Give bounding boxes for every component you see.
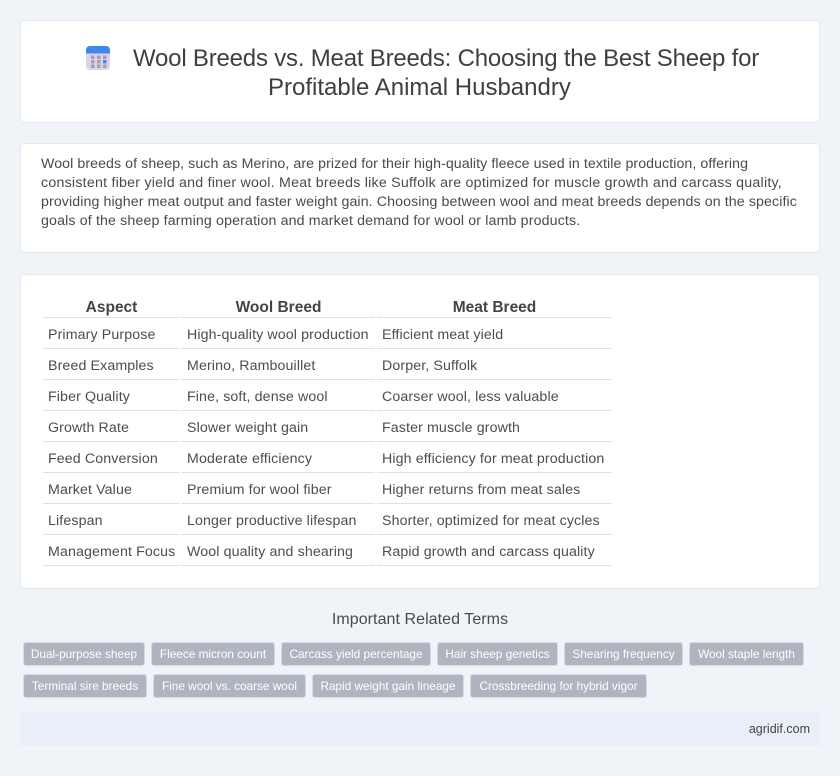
table rows: Primary Purpose bbox=[48, 327, 155, 343]
related term tags: Fleece micron count bbox=[160, 647, 266, 661]
panel: introduction bbox=[20, 143, 820, 253]
related term tags: Carcass yield percentage bbox=[289, 647, 423, 661]
table rows: Slower weight gain bbox=[187, 420, 308, 436]
table rows: Merino, Rambouillet bbox=[187, 358, 315, 374]
table rows: Faster muscle growth bbox=[382, 420, 520, 436]
table rows: Moderate efficiency bbox=[187, 451, 312, 467]
table rows: Rapid growth and carcass quality bbox=[382, 544, 595, 560]
table rows: Shorter, optimized for meat cycles bbox=[382, 513, 600, 529]
related term tags: Crossbreeding for hybrid vigor bbox=[479, 679, 638, 693]
related term tags: Terminal sire breeds bbox=[32, 679, 138, 693]
table rows: Lifespan bbox=[48, 513, 103, 529]
table header: Wool Breed bbox=[236, 299, 321, 316]
intro text: consistent fiber yield and finer wool. Meat breeds like Suffolk are optimized for muscle growth and carcass quality, bbox=[41, 175, 782, 191]
table header: Aspect bbox=[86, 299, 137, 316]
title: Wool Breeds vs. Meat Breeds: Choosing the Best Sheep for bbox=[133, 45, 759, 72]
table rows: Market Value bbox=[48, 482, 132, 498]
table rows: Coarser wool, less valuable bbox=[382, 389, 559, 405]
related term tags: Dual-purpose sheep bbox=[31, 647, 137, 661]
intro text: providing higher meat output and faster weight gain. Choosing between wool and meat breeds depends on the specific bbox=[41, 194, 797, 210]
table rows: Dorper, Suffolk bbox=[382, 358, 477, 374]
comparison table bbox=[43, 299, 612, 566]
table rows: Longer productive lifespan bbox=[187, 513, 357, 529]
table rows: Growth Rate bbox=[48, 420, 129, 436]
table rows: Fine, soft, dense wool bbox=[187, 389, 328, 405]
intro text bbox=[41, 156, 797, 229]
table rows: Management Focus bbox=[48, 544, 175, 560]
table rows: Efficient meat yield bbox=[382, 327, 503, 343]
related term tags bbox=[23, 642, 804, 698]
table rows: Wool quality and shearing bbox=[187, 544, 353, 560]
header panel bbox=[20, 20, 820, 123]
table rows: High efficiency for meat production bbox=[382, 451, 604, 467]
panel: comparison table bbox=[20, 274, 820, 589]
related term tags: Fine wool vs. coarse wool bbox=[162, 679, 297, 693]
footer bar bbox=[20, 712, 820, 746]
table rows: Feed Conversion bbox=[48, 451, 158, 467]
related term tags: Hair sheep genetics bbox=[445, 647, 550, 661]
table rows: Breed Examples bbox=[48, 358, 154, 374]
title bbox=[133, 45, 759, 101]
table rows: Premium for wool fiber bbox=[187, 482, 332, 498]
related terms heading: Important Related Terms bbox=[332, 611, 508, 628]
table header: Meat Breed bbox=[453, 299, 536, 316]
related term tags: Wool staple length bbox=[698, 647, 795, 661]
title: Profitable Animal Husbandry bbox=[268, 74, 571, 101]
intro text: goals of the sheep farming operation and market demand for wool or lamb products. bbox=[41, 213, 580, 229]
table header bbox=[43, 299, 612, 318]
table rows bbox=[43, 327, 612, 566]
related term tags: Rapid weight gain lineage bbox=[320, 679, 456, 693]
icon: calendar bbox=[86, 46, 110, 70]
footer credit: agridif.com bbox=[749, 722, 810, 736]
table rows: High-quality wool production bbox=[187, 327, 369, 343]
table rows: Higher returns from meat sales bbox=[382, 482, 580, 498]
table rows: Fiber Quality bbox=[48, 389, 130, 405]
intro text: Wool breeds of sheep, such as Merino, are prized for their high-quality fleece used in textile production, offering bbox=[41, 156, 748, 172]
related term tags: Shearing frequency bbox=[572, 647, 675, 661]
